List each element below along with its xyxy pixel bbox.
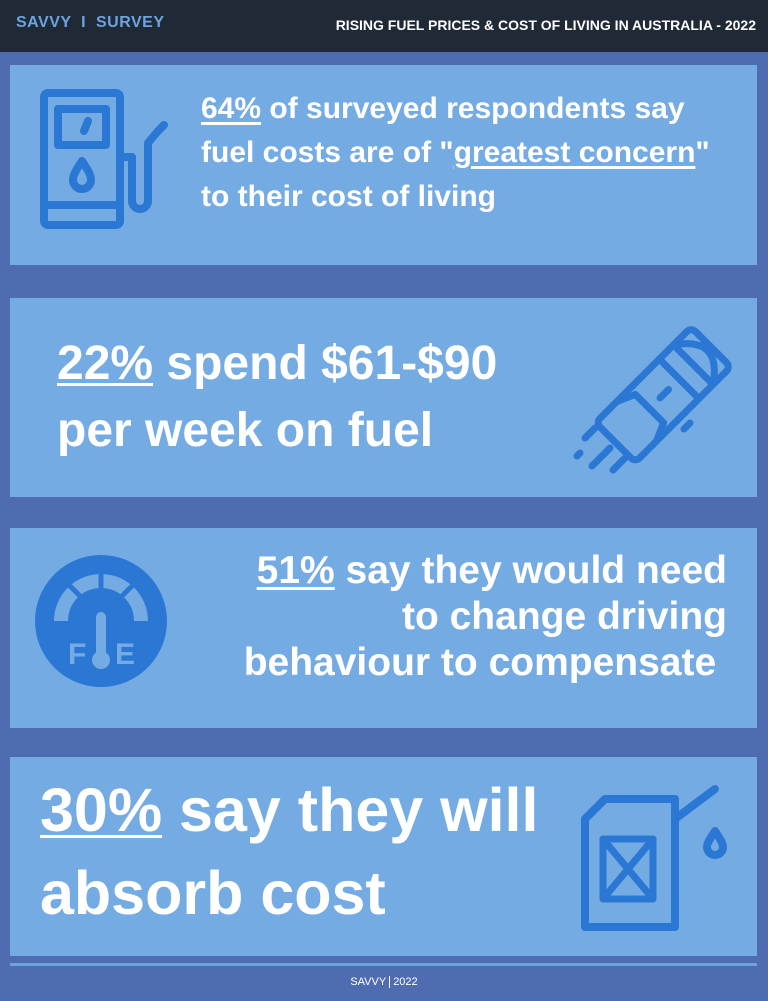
icon: fuel gauge: E [115,638,135,671]
icon: fuel gauge: F [68,638,86,671]
icon: fuel pump [40,89,168,229]
header title: RISING FUEL PRICES & COST OF LIVING IN AUSTRALIA - 2022 [336,17,756,33]
text block: absorb cost [40,859,386,927]
header bar [0,0,768,52]
text block [40,776,538,927]
icon: fuel gauge [35,555,167,687]
text block: per week on fuel [57,404,433,457]
brand: SAVVY I SURVEY [16,14,164,31]
panel: greatest concern [10,65,757,265]
icon: speeding car [574,326,732,474]
text block: fuel costs are of "greatest concern" [201,136,710,169]
text block [201,92,710,213]
footer: SAVVY 2022 [350,976,418,988]
panel: driving behaviour [10,528,757,728]
text block: 51% say they would need [257,549,727,592]
divider [10,963,757,966]
text block [244,549,727,684]
text block: 22% spend $61-$90 [57,337,497,390]
text block: 64% of surveyed respondents say [201,92,685,125]
text block: to change driving [402,595,727,638]
text block [57,337,497,457]
panel: absorb cost [10,757,757,956]
icon: jerry can [581,785,727,931]
text block: behaviour to compensate [244,641,716,684]
text block: 30% say they will [40,776,538,844]
text block: to their cost of living [201,180,496,213]
panel: weekly spend [10,298,757,497]
